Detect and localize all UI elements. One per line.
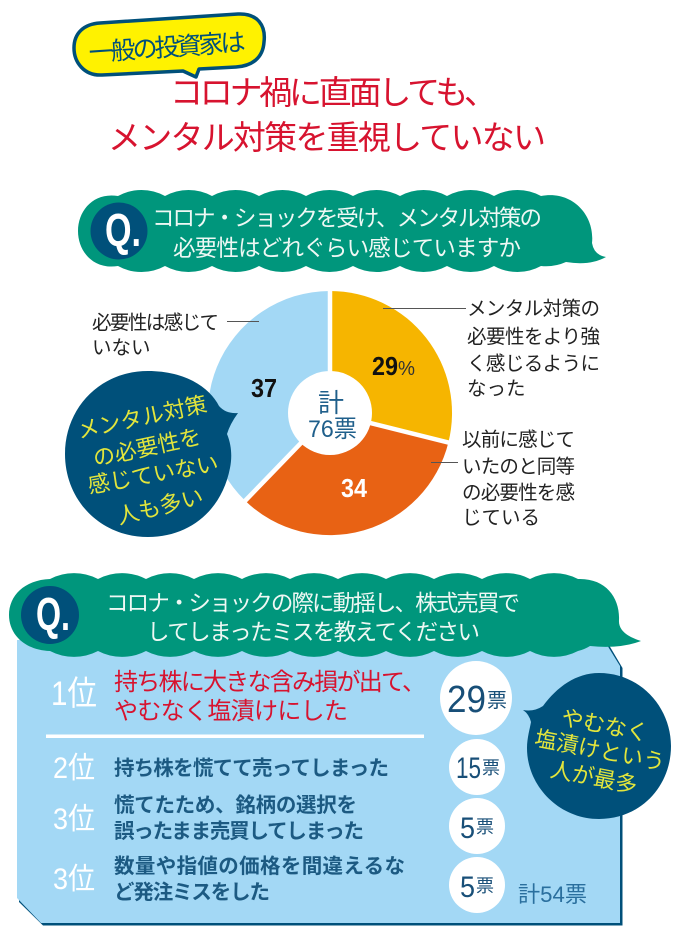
callout: most held losing stocks: やむなく (559, 705, 650, 746)
pie centre total: 76票 (308, 416, 357, 443)
rank 3 row: wrong stock: 慌てたため、銘柄の選択を (114, 794, 357, 817)
votes 15: 15 (456, 752, 481, 785)
rank 2 row (53, 739, 505, 795)
rank 3 row: wrong stock: 誤ったまま売買してしまった (114, 820, 364, 843)
title: コロナ禍に直面しても、 (170, 74, 497, 111)
callout: many feel no need: メンタル対策 (75, 392, 209, 443)
label: same need (462, 429, 575, 529)
callout: many feel no need: 感じていない (86, 451, 220, 498)
label: stronger need: メンタル対策の (467, 298, 600, 320)
value 29%: 29 (372, 351, 398, 381)
rank 1 row: やむなく塩漬けにした (114, 698, 348, 725)
title (108, 74, 546, 156)
rank 1 row: 1位 (51, 675, 97, 713)
label: no need (92, 312, 219, 359)
rank 3 row: wrong stock: 3位 (53, 803, 95, 836)
votes 29: 29 (447, 679, 486, 721)
votes 5: 5 (460, 812, 475, 845)
label: stronger need (467, 298, 600, 400)
question text 2: してしまったミスを教えてください (147, 620, 480, 645)
value 29%: % (398, 358, 415, 380)
icon: Q badge: Q. (36, 588, 70, 640)
label: no need: いない (92, 337, 151, 359)
callout: many feel no need (65, 371, 238, 537)
pie centre total: 計 (318, 388, 344, 418)
label: stronger need: 必要性をより強 (467, 326, 600, 348)
question text 1 (152, 206, 542, 261)
votes 5: 5 (460, 871, 475, 904)
icon: Q badge (90, 202, 148, 260)
total votes: 計54票 (518, 882, 587, 907)
votes 15: 票 (482, 758, 500, 778)
speech bubble: general investors: 一般の投資家は (88, 29, 246, 67)
slice: 34 same need (245, 413, 448, 535)
rank 1 row (51, 661, 512, 735)
votes 29 (440, 661, 512, 735)
value 29% (372, 351, 415, 381)
rank 1 row: 持ち株に大きな含み損が出て、 (114, 669, 426, 696)
label: stronger need: なった (467, 378, 526, 400)
rank 2 row: 持ち株を慌てて売ってしまった (114, 757, 389, 780)
slice: 29 stronger need (330, 291, 452, 442)
value 37: 37 (251, 373, 277, 403)
slice: 37 no need (208, 291, 330, 501)
panel: mistakes ranking (17, 640, 622, 926)
votes 5: 票 (476, 876, 494, 896)
callout: most held losing stocks: 塩漬けという (533, 726, 667, 775)
rank 3 row: order mistake: 数量や指値の価格を間違えるな (114, 855, 405, 878)
question text 1: 必要性はどれぐらい感じていますか (173, 236, 521, 261)
votes 5 (449, 798, 505, 854)
rank 3 row: order mistake: 3位 (53, 863, 95, 896)
pie centre total (308, 388, 357, 443)
rank 2 row: 2位 (53, 752, 95, 785)
pie chart (208, 288, 452, 535)
question text 2 (106, 591, 520, 645)
icon: Q badge (21, 586, 79, 644)
title: メンタル対策を重視していない (108, 119, 546, 156)
label: no need: 必要性は感じて (92, 312, 219, 334)
votes 15 (449, 739, 505, 795)
label: same need: の必要性を感 (462, 482, 575, 504)
question text 2: コロナ・ショックの際に動揺し、株式売買で (106, 591, 520, 616)
label: stronger need: く感じるように (467, 353, 600, 375)
label: same need: 以前に感じて (462, 429, 575, 451)
votes 5: 票 (476, 817, 494, 837)
rank 3 row: order mistake: ど発注ミスをした (114, 881, 270, 904)
question text 1: コロナ・ショックを受け、メンタル対策の (152, 206, 542, 231)
question bubble 1 (78, 190, 606, 272)
speech bubble: general investors (74, 14, 264, 77)
votes 29: 票 (487, 690, 507, 712)
rank 3 row: wrong stock (53, 794, 505, 854)
question bubble 2 (9, 573, 641, 657)
callout: many feel no need: 人も多い (114, 484, 206, 529)
icon: Q badge: Q. (105, 204, 141, 256)
value 34: 34 (341, 473, 367, 503)
votes 5 (449, 857, 505, 913)
callout: many feel no need: の必要性を (91, 424, 204, 471)
callout: most held losing stocks: 人が最多 (548, 757, 639, 798)
rank 3 row: order mistake (53, 855, 505, 913)
label: same need: いたのと同等 (462, 456, 575, 478)
label: same need: じている (462, 507, 540, 529)
callout: most held losing stocks (523, 673, 671, 819)
